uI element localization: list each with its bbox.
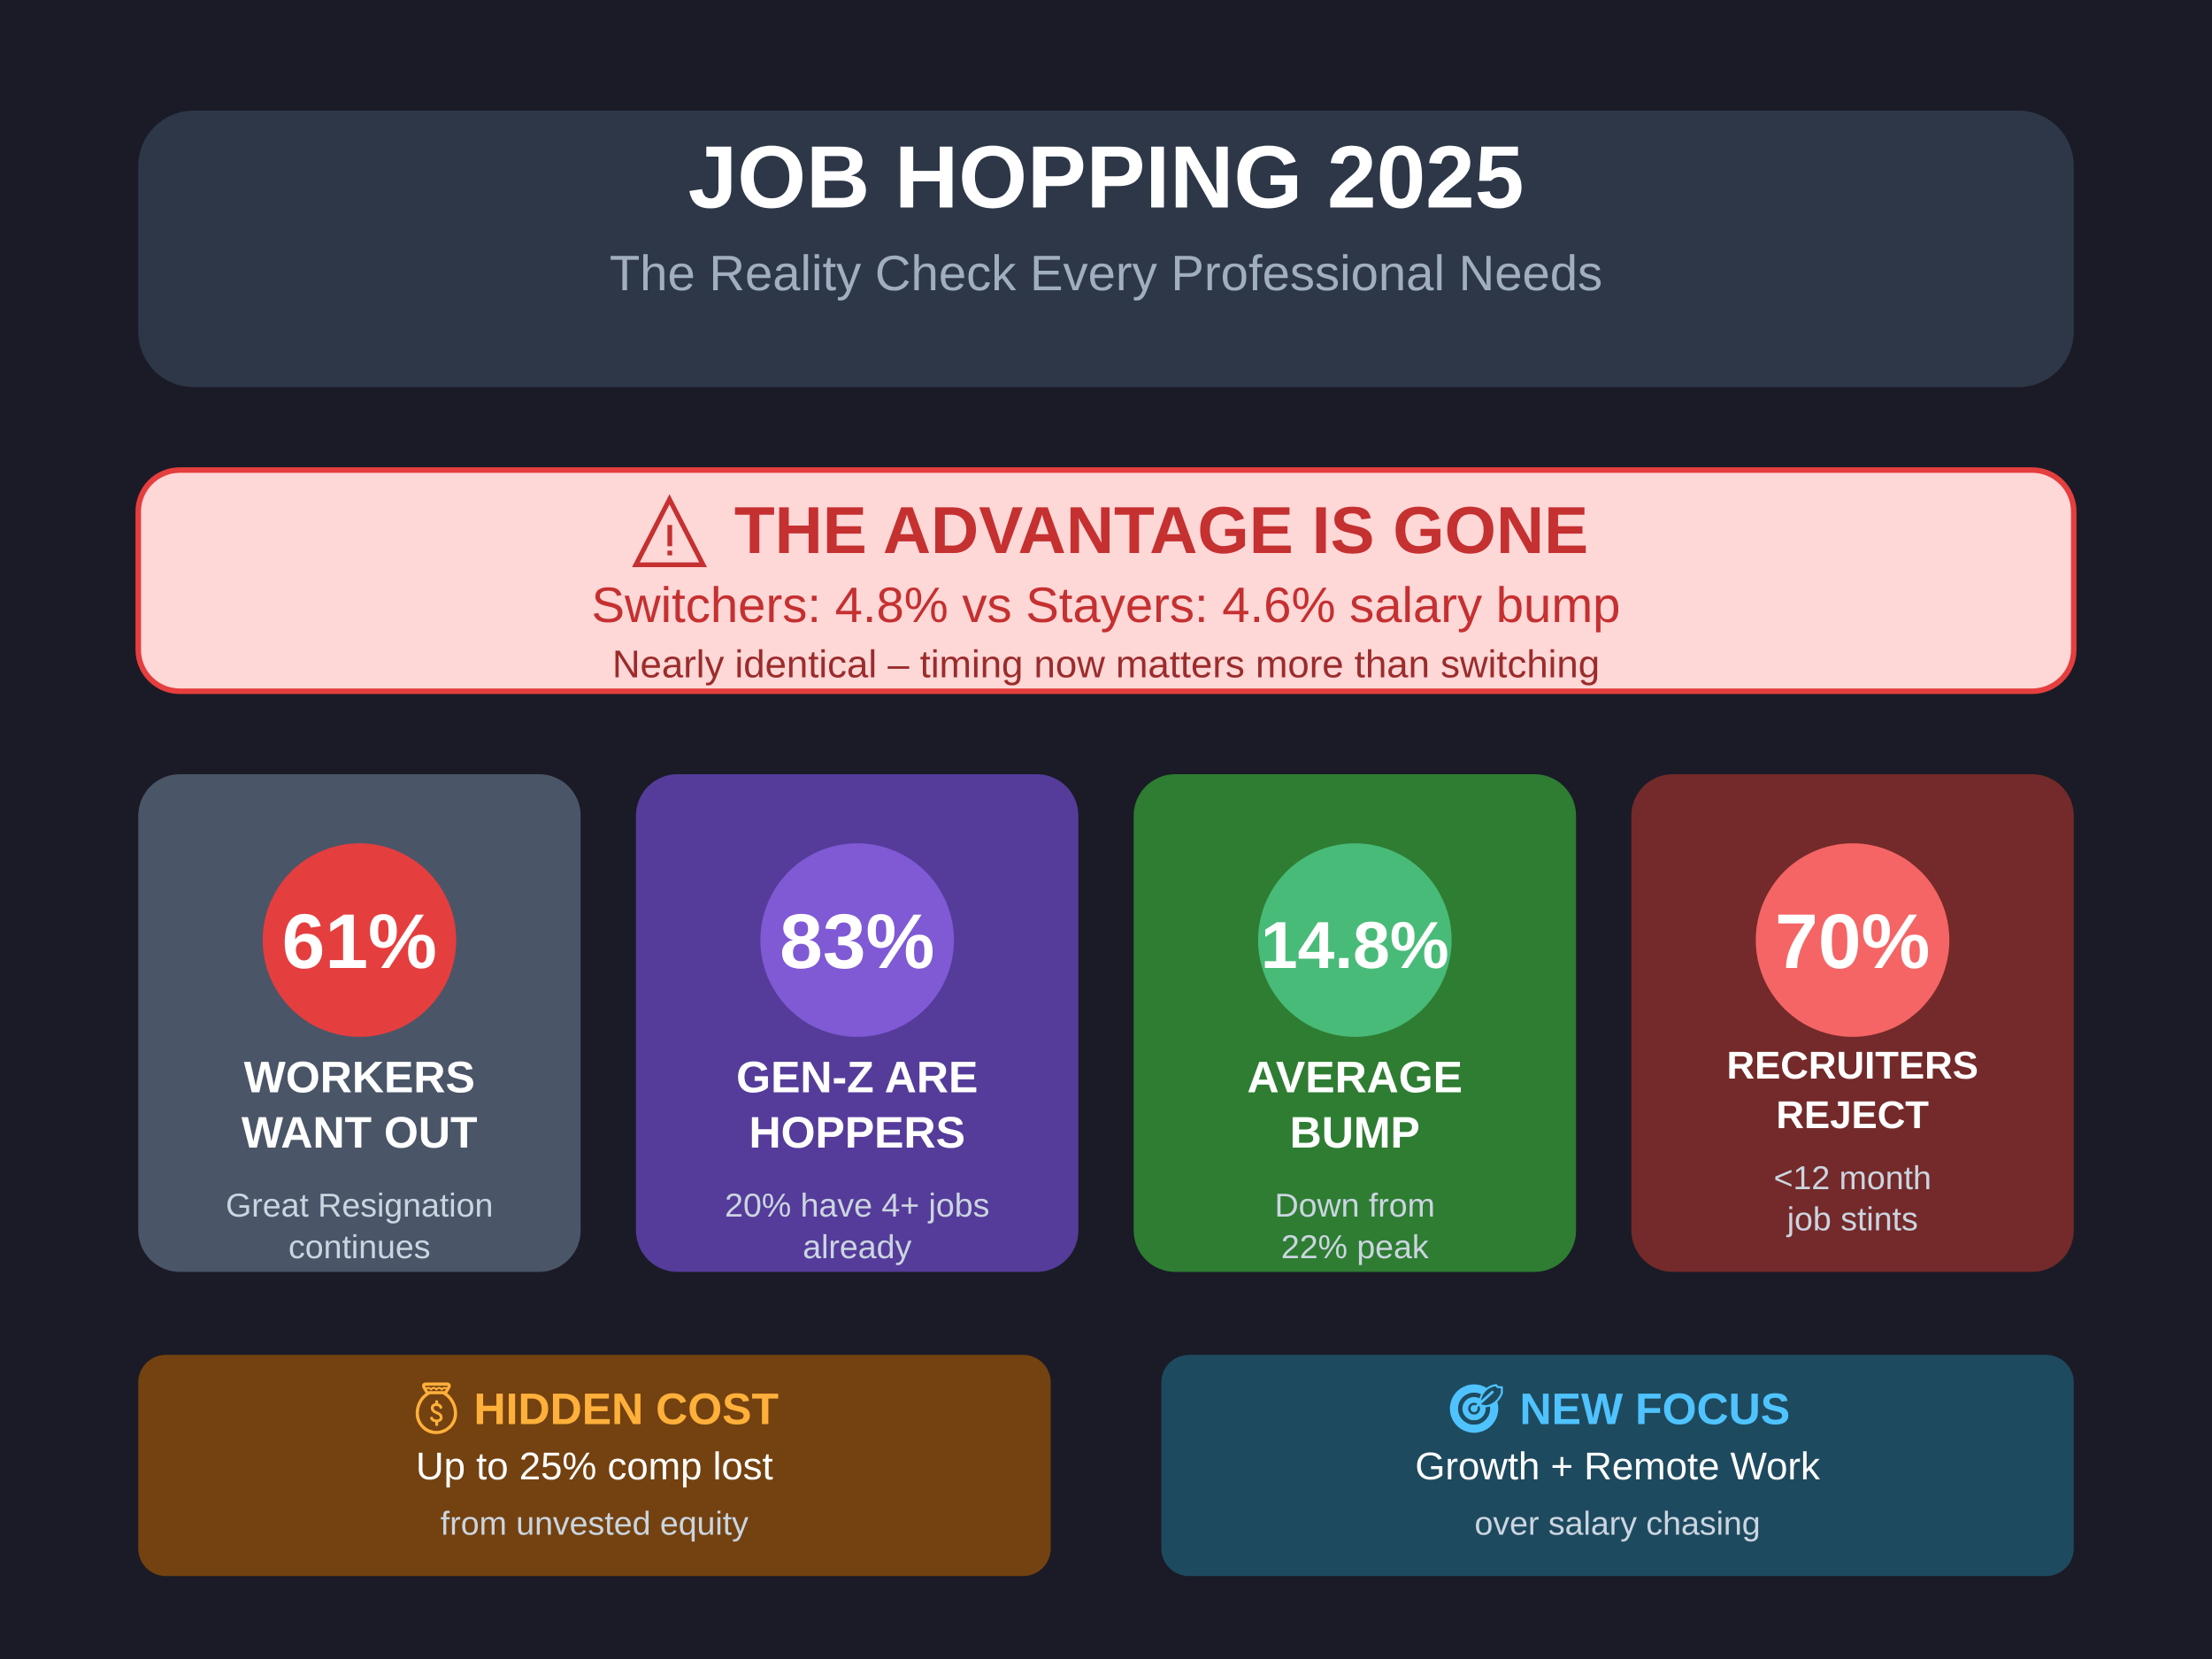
detail: already bbox=[803, 1228, 911, 1266]
alert heading: THE ADVANTAGE IS GONE bbox=[734, 495, 1588, 570]
title: JOB HOPPING 2025 bbox=[688, 127, 1524, 227]
heading: HIDDEN COST bbox=[474, 1388, 780, 1435]
panel: workers want out bbox=[138, 774, 580, 1272]
detail: 22% peak bbox=[1281, 1228, 1432, 1266]
icon: money bag bbox=[418, 1384, 456, 1432]
detail: <12 month bbox=[1774, 1158, 1932, 1197]
label: RECRUITERS bbox=[1727, 1042, 1978, 1087]
main line: Up to 25% comp lost bbox=[416, 1443, 773, 1487]
label: AVERAGE bbox=[1247, 1056, 1463, 1103]
detail: 20% have 4+ jobs bbox=[725, 1187, 989, 1225]
stat circle: 83% bbox=[760, 843, 954, 1037]
detail: from unvested equity bbox=[441, 1504, 749, 1543]
label: REJECT bbox=[1776, 1092, 1930, 1136]
panel: new focus bbox=[1161, 1355, 2074, 1576]
stat circle: 70%: 70% bbox=[1775, 899, 1931, 984]
stat circle: 83%: 83% bbox=[780, 899, 935, 984]
detail: Great Resignation bbox=[226, 1187, 493, 1225]
stat circle: 61%: 61% bbox=[282, 899, 437, 984]
main line: Growth + Remote Work bbox=[1415, 1443, 1823, 1487]
label: WORKERS bbox=[244, 1056, 476, 1103]
label: GEN-Z ARE bbox=[736, 1056, 979, 1103]
label: BUMP bbox=[1290, 1111, 1421, 1158]
stat circle: 14.8%: 14.8% bbox=[1261, 910, 1449, 984]
panel: average bump bbox=[1133, 774, 1576, 1272]
alert note: Nearly identical – timing now matters more than switching bbox=[612, 641, 1600, 686]
detail: continues bbox=[288, 1228, 431, 1266]
subtitle: The Reality Check Every Professional Needs bbox=[610, 246, 1602, 302]
icon: target with feather bbox=[1450, 1385, 1502, 1432]
stat circle: 14.8% bbox=[1258, 843, 1452, 1037]
alert comparison: Switchers: 4.8% vs Stayers: 4.6% salary bump bbox=[592, 578, 1620, 634]
panel: hidden cost bbox=[138, 1355, 1051, 1576]
label: WANT OUT bbox=[242, 1111, 478, 1158]
detail: Down from bbox=[1275, 1187, 1435, 1225]
panel: gen-z are hoppers bbox=[636, 774, 1079, 1272]
panel: recruiters reject bbox=[1632, 774, 2074, 1272]
detail: job stints bbox=[1785, 1200, 1918, 1239]
icon: warning triangle bbox=[636, 499, 703, 565]
label: HOPPERS bbox=[749, 1111, 966, 1158]
heading: NEW FOCUS bbox=[1520, 1388, 1791, 1435]
stat circle: 70% bbox=[1755, 843, 1949, 1037]
detail: over salary chasing bbox=[1475, 1504, 1761, 1543]
panel: header bbox=[138, 111, 2074, 388]
panel: alert bbox=[138, 470, 2074, 691]
stat circle: 61% bbox=[263, 843, 457, 1037]
